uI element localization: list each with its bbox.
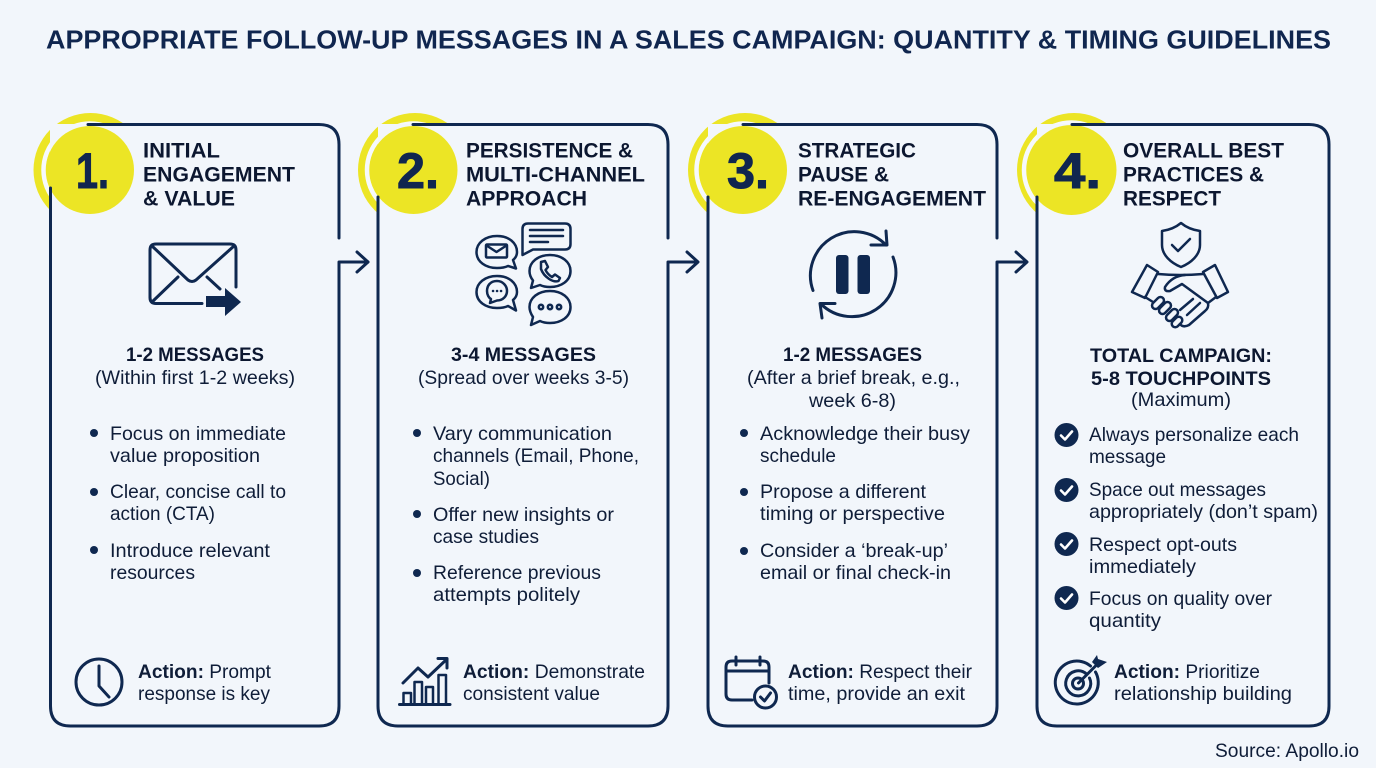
checklist: Always personalize each [1089, 424, 1299, 446]
icon: clock [76, 659, 122, 705]
bullet list [413, 423, 639, 606]
heading: RESPECT [1123, 186, 1221, 210]
action note [463, 661, 645, 705]
panel border and arrow to step 2 [50, 124, 368, 726]
panel border [1037, 124, 1329, 726]
action note: relationship building [1114, 683, 1292, 705]
bullet list: Introduce relevant [110, 540, 271, 562]
heading: MULTI-CHANNEL [466, 162, 645, 186]
panel: step 4 overall best practices [1017, 113, 1329, 726]
action note [788, 661, 972, 705]
icon: pause with cycle arrows [810, 231, 896, 318]
bullet list: Reference previous [433, 562, 601, 584]
number badge 3 [688, 113, 787, 214]
number badge 1: 1. [76, 143, 109, 199]
number badge 4 [1017, 113, 1116, 215]
message count: (After a brief break, e.g., [747, 367, 960, 389]
checklist: quantity [1089, 610, 1161, 632]
checklist: appropriately (don’t spam) [1089, 501, 1318, 523]
message count: week 6-8) [808, 390, 896, 412]
icon: shield and handshake [1132, 223, 1228, 329]
panel: step 3 strategic pause [688, 113, 1027, 726]
checklist [1054, 423, 1318, 632]
heading [1123, 138, 1284, 210]
bullet list: email or final check-in [760, 562, 951, 584]
campaign total [1090, 345, 1272, 411]
action note [138, 661, 272, 705]
checklist: Respect opt-outs [1089, 534, 1237, 556]
heading: PAUSE & [798, 162, 889, 186]
checklist: Space out messages [1089, 479, 1266, 501]
bullet list: Propose a different [760, 481, 927, 503]
checklist: Focus on quality over [1089, 588, 1272, 610]
title: APPROPRIATE FOLLOW-UP MESSAGES IN A SALES CAMPAIGN: QUANTITY & TIMING GUIDELINES [46, 26, 1331, 54]
campaign total: 5-8 TOUCHPOINTS [1091, 368, 1271, 390]
message count [95, 344, 295, 389]
heading [798, 138, 986, 210]
panel: step 1 initial engagement [34, 113, 368, 726]
bullet list: Clear, concise call to [110, 481, 286, 503]
message count [747, 344, 960, 412]
bullet list: timing or perspective [760, 503, 945, 525]
action note: Action: Demonstrate [463, 661, 645, 683]
checklist: immediately [1089, 556, 1196, 578]
heading: PERSISTENCE & [466, 138, 633, 162]
heading: ENGAGEMENT [143, 162, 295, 186]
icon: growth chart [400, 658, 450, 704]
icon: target with arrow [1055, 655, 1107, 704]
bullet list: channels (Email, Phone, [433, 445, 639, 467]
message count: 3-4 MESSAGES [451, 344, 596, 366]
panel border and arrow to step 4 [708, 124, 1027, 726]
bullet list: Focus on immediate [110, 423, 286, 445]
message count [418, 344, 629, 389]
bullet list: value proposition [110, 445, 260, 467]
heading: INITIAL [143, 138, 220, 162]
action note: response is key [138, 683, 270, 705]
number badge 1 [34, 113, 134, 214]
action note: Action: Prioritize [1114, 661, 1260, 683]
bullet list: Vary communication [433, 423, 612, 445]
campaign total: (Maximum) [1131, 389, 1231, 411]
bullet list: Offer new insights or [433, 504, 614, 526]
bullet list [740, 423, 970, 584]
message count: (Spread over weeks 3-5) [418, 367, 629, 389]
number badge 2 [358, 113, 458, 214]
bullet list: case studies [433, 526, 539, 548]
bullet list: Social) [433, 468, 490, 490]
heading [143, 138, 295, 210]
icon: chat bubbles [476, 224, 570, 325]
panel: step 2 persistence [358, 113, 698, 726]
heading: OVERALL BEST [1123, 138, 1284, 162]
bullet list: schedule [760, 445, 836, 467]
action note: consistent value [463, 683, 600, 705]
bullet list: resources [110, 562, 195, 584]
bullet list [90, 423, 286, 584]
message count: 1-2 MESSAGES [126, 344, 264, 366]
bullet list: Acknowledge their busy [760, 423, 970, 445]
number badge 2: 2. [397, 143, 439, 199]
action note [1114, 661, 1292, 705]
action note: Action: Respect their [788, 661, 972, 683]
message count: (Within first 1-2 weeks) [95, 367, 295, 389]
bullet list: action (CTA) [110, 503, 215, 525]
source note: Source: Apollo.io [1215, 740, 1359, 762]
heading [466, 138, 645, 210]
heading: STRATEGIC [798, 138, 916, 162]
heading: RE-ENGAGEMENT [798, 186, 986, 210]
panel border and arrow to step 3 [378, 124, 698, 726]
bullet list: Consider a ‘break-up’ [760, 540, 948, 562]
action note: Action: Prompt [138, 661, 272, 683]
bullet list: attempts politely [433, 584, 580, 606]
heading: PRACTICES & [1123, 162, 1264, 186]
action note: time, provide an exit [788, 683, 966, 705]
number badge 3: 3. [727, 143, 769, 199]
number badge 4: 4. [1054, 143, 1101, 199]
icon: envelope with arrow [150, 244, 241, 316]
heading: APPROACH [466, 186, 587, 210]
icon: calendar with check [726, 657, 776, 708]
heading: & VALUE [143, 186, 235, 210]
campaign total: TOTAL CAMPAIGN: [1090, 345, 1272, 367]
message count: 1-2 MESSAGES [783, 344, 922, 366]
checklist: message [1089, 446, 1166, 468]
